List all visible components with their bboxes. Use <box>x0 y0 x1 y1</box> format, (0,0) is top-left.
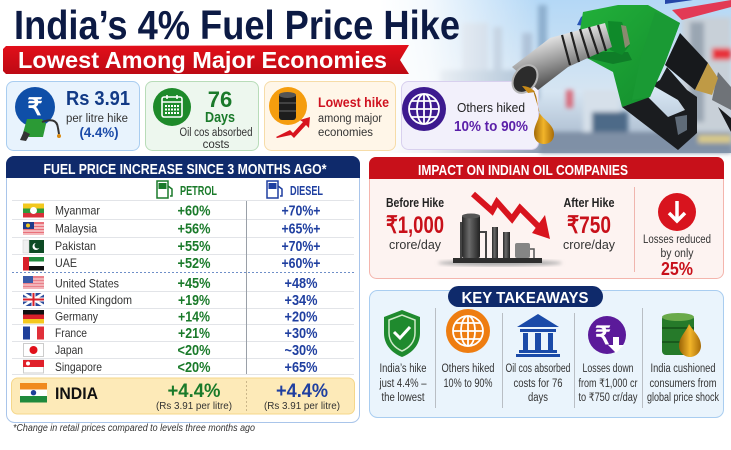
icon: rupee with fuel pump: ₹ <box>27 94 43 121</box>
row: France: +30% <box>284 326 318 342</box>
row: Pakistan <box>23 239 320 255</box>
row: United States: +45% <box>178 276 211 292</box>
after hike: crore/day <box>563 237 615 252</box>
row: Japan <box>24 343 318 359</box>
card: 76 days: 76 <box>208 87 232 112</box>
card: 76 days: Oil cos absorbed <box>180 127 252 139</box>
row: Singapore: Singapore <box>55 360 102 374</box>
row: Singapore: <20% <box>178 360 211 376</box>
takeaway: losses down: to ₹750 cr/day <box>578 392 638 404</box>
highlight row: India <box>12 378 354 414</box>
panel: fuel price table <box>6 156 360 422</box>
takeaway: absorbed costs: costs for 76 <box>514 378 562 390</box>
takeaway: absorbed costs <box>506 314 570 404</box>
losses reduced callout <box>643 193 711 279</box>
card: Rs 3.91 per litre <box>6 82 140 150</box>
row: Myanmar: Myanmar <box>55 204 100 218</box>
row: Germany: +20% <box>284 310 318 326</box>
card: others hiked <box>402 82 538 150</box>
card: Rs 3.91 per litre: (4.4%) <box>80 124 118 140</box>
card: 76 days: costs <box>203 139 230 151</box>
after hike: ₹750 <box>567 212 611 239</box>
row: Singapore: +65% <box>284 360 318 376</box>
column head: petrol: PETROL <box>180 184 217 198</box>
footnote: *Change in retail prices compared to levels three months ago <box>13 423 255 434</box>
row: United States: United States <box>55 276 119 290</box>
losses reduced callout: 25% <box>661 259 693 279</box>
row: United Kingdom: +19% <box>178 293 210 309</box>
row: Japan: <20% <box>178 343 211 359</box>
losses reduced callout: by only <box>660 248 694 260</box>
row: United Kingdom: United Kingdom <box>55 293 132 307</box>
takeaway: losses down: Losses down <box>582 363 634 375</box>
takeaway: others hiked: Others hiked <box>442 363 494 375</box>
row: Japan: ~30% <box>284 343 318 359</box>
after hike <box>563 195 615 252</box>
impact header: IMPACT ON INDIAN OIL COMPANIES <box>418 162 628 179</box>
row: Pakistan: Pakistan <box>55 239 96 253</box>
panel: impact on Indian oil companies <box>369 157 724 279</box>
card: Rs 3.91 per litre: per litre hike <box>66 113 128 125</box>
row: UAE: +60%+ <box>282 256 320 272</box>
row: Pakistan: +55% <box>178 239 211 255</box>
refinery illustration <box>438 214 562 266</box>
row: France: France <box>55 326 87 340</box>
row: Pakistan: +70%+ <box>282 239 320 255</box>
takeaway: absorbed costs: Oil cos absorbed <box>506 363 570 375</box>
icon: fuel nozzle with oil drop <box>507 5 731 150</box>
highlight row: India: +4.4% <box>276 381 328 402</box>
before hike: Before Hike <box>386 195 444 210</box>
takeaway: losses down: from ₹1,000 cr <box>578 378 638 390</box>
table header <box>6 156 360 178</box>
takeaway: lowest hike: the lowest <box>382 392 425 404</box>
row: Malaysia: +65%+ <box>282 222 320 238</box>
icon: green shield <box>384 310 420 357</box>
row: UAE <box>23 256 320 272</box>
impact header <box>369 157 724 179</box>
takeaway: lowest hike: India’s hike <box>380 363 426 375</box>
card: Rs 3.91 per litre: Rs 3.91 <box>66 88 130 110</box>
row: UAE: UAE <box>55 256 77 270</box>
row: Malaysia <box>23 222 320 238</box>
card: lowest hike <box>264 82 396 150</box>
takeaway: absorbed costs: days <box>528 392 548 404</box>
table header: FUEL PRICE INCREASE SINCE 3 MONTHS AGO* <box>44 162 327 178</box>
card: lowest hike: Lowest hike <box>318 94 389 110</box>
before hike <box>386 195 444 252</box>
icon: bank building <box>516 314 560 357</box>
highlight row: India: INDIA <box>55 384 98 403</box>
panel: key takeaways <box>370 286 724 418</box>
icon: rupee with down arrow: ₹ <box>595 322 611 350</box>
row: United States: +48% <box>284 276 318 292</box>
row: Singapore <box>23 360 318 376</box>
takeaway: cushioned consumers <box>647 313 719 404</box>
card: lowest hike: economies <box>318 127 373 139</box>
row: Myanmar: +70%+ <box>282 204 320 220</box>
hero background: blurred city skyline and fuel station <box>380 0 731 153</box>
row: Myanmar <box>23 204 320 220</box>
highlight row: India: (Rs 3.91 per litre) <box>264 400 340 412</box>
card: 76 days: Days <box>205 109 235 126</box>
losses reduced callout: Losses reduced <box>643 234 711 246</box>
row: France <box>23 326 318 342</box>
row: Malaysia: Malaysia <box>55 222 97 236</box>
takeaway: others hiked <box>442 309 494 390</box>
row: Germany: Germany <box>55 310 98 324</box>
red falling arrow <box>473 194 550 239</box>
icon: oil barrel with rising arrow <box>269 87 310 138</box>
highlight row: India: +4.4% <box>168 381 221 402</box>
row: Japan: Japan <box>55 343 83 357</box>
flag: India <box>20 383 47 402</box>
icon: calendar <box>153 88 191 126</box>
icon: orange globe <box>446 309 490 353</box>
column head: diesel <box>267 181 323 198</box>
after hike: After Hike <box>564 195 614 210</box>
before hike: ₹1,000 <box>386 212 444 239</box>
row: UAE: +52% <box>178 256 211 272</box>
card: lowest hike: among major <box>318 113 382 125</box>
row: Myanmar: +60% <box>178 204 211 220</box>
row: Germany <box>23 310 318 326</box>
key takeaways pill heading: KEY TAKEAWAYS <box>462 290 589 307</box>
takeaway: lowest hike <box>379 310 427 404</box>
row: United Kingdom: +34% <box>284 293 318 309</box>
takeaway: others hiked: 10% to 90% <box>444 378 492 390</box>
icon: green barrel with oil drop <box>662 313 701 357</box>
icon: purple globe <box>402 87 446 131</box>
title: India’s 4% Fuel Price Hike <box>14 2 460 48</box>
takeaway: losses down <box>578 316 638 404</box>
row: United States <box>23 276 318 292</box>
highlight row: India: (Rs 3.91 per litre) <box>156 400 232 412</box>
takeaway: lowest hike: just 4.4% – <box>379 378 427 390</box>
before hike: crore/day <box>389 237 441 252</box>
takeaway: cushioned consumers: consumers from <box>650 378 716 390</box>
takeaway: cushioned consumers: India cushioned <box>650 363 716 375</box>
row: France: +21% <box>178 326 210 342</box>
row: United Kingdom <box>23 293 318 309</box>
column head: petrol <box>157 181 217 198</box>
card: others hiked: 10% to 90% <box>454 118 528 135</box>
subtitle ribbon: Lowest Among Major Economies <box>18 47 387 73</box>
row: Germany: +14% <box>178 310 210 326</box>
row: Malaysia: +56% <box>178 222 211 238</box>
column head: diesel: DIESEL <box>290 184 323 198</box>
card: 76 days <box>146 82 258 151</box>
card: others hiked: Others hiked <box>457 100 525 115</box>
